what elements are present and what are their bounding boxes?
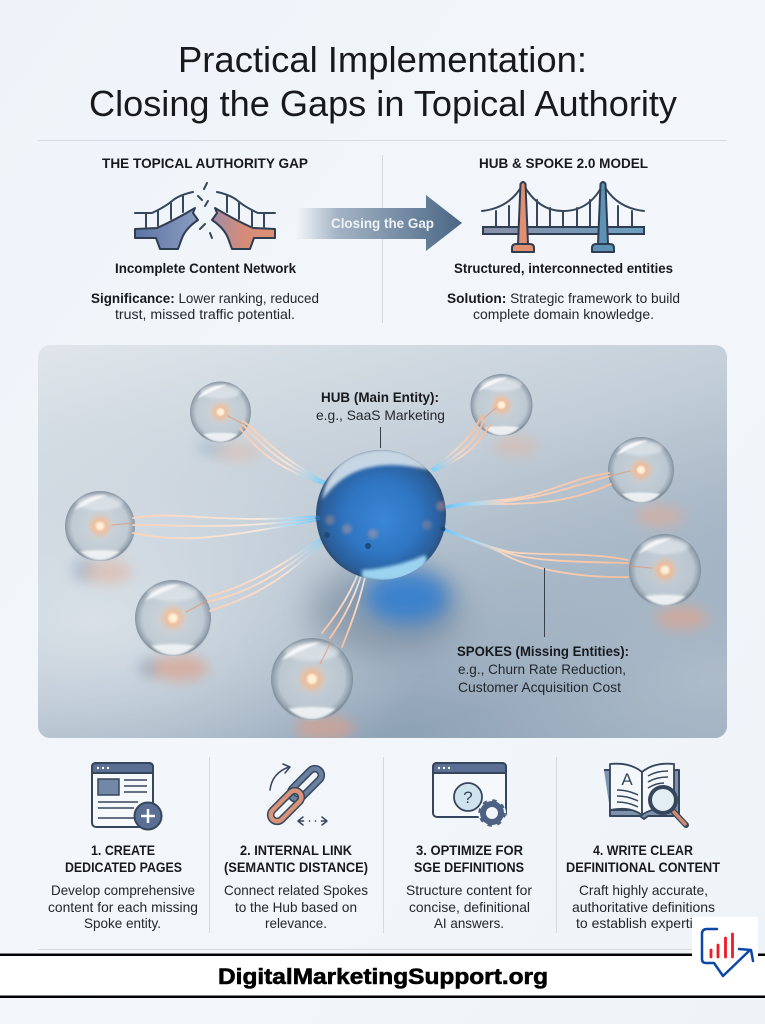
title: Practical Implementation: (178, 39, 587, 80)
text: significance (91, 290, 319, 322)
footer url: DigitalMarketingSupport.org (218, 964, 548, 989)
panel: hub and spoke model (447, 155, 680, 322)
text: solution: complete domain knowledge. (473, 306, 654, 322)
sphere: hub (316, 449, 446, 584)
step 4: write clear definitional content (566, 764, 721, 931)
label: spokes missing entities: SPOKES (Missing Entities): (457, 643, 629, 659)
sphere: spoke left (65, 491, 135, 561)
icon: chain link with arrows (268, 764, 327, 825)
description: content for each missing (48, 899, 198, 915)
description (406, 882, 532, 931)
description (224, 882, 368, 931)
heading: DEDICATED PAGES (65, 860, 182, 875)
description: concise, definitional (409, 899, 530, 915)
heading (65, 843, 182, 875)
icon: window with question mark and gear (433, 763, 506, 827)
description (48, 882, 198, 931)
icon: web page with plus (92, 763, 162, 830)
text: significance: trust, missed traffic potential. (115, 306, 295, 322)
description: Craft highly accurate, (579, 882, 708, 898)
heading (224, 843, 368, 875)
title (89, 39, 677, 124)
label: spokes missing entities: e.g., Churn Rate Reduction, (458, 661, 626, 677)
icon: complete suspension bridge (482, 182, 644, 252)
label: hub main entity: HUB (Main Entity): (321, 389, 439, 405)
spoke connectors (112, 408, 652, 664)
heading (414, 843, 524, 875)
sphere: spoke right (608, 437, 674, 503)
logo: chat bubble with bar chart and arrow (692, 917, 758, 979)
description: AI answers. (434, 915, 504, 931)
text: significance: Significance: Lower ranking, reduced (91, 290, 319, 306)
footer band (0, 954, 765, 998)
description: Develop comprehensive (51, 882, 195, 898)
arrow: closing the gap (296, 195, 462, 251)
heading: hub and spoke 2.0 model: HUB & SPOKE 2.0 MODEL (479, 155, 648, 171)
description: relevance. (265, 915, 327, 931)
caption: structured interconnected entities: Structured, interconnected entities (454, 260, 673, 276)
sphere: spoke lower left (135, 580, 211, 656)
label: hub main entity: e.g., SaaS Marketing (316, 407, 445, 423)
heading: (SEMANTIC DISTANCE) (224, 860, 368, 875)
label: spokes missing entities: Customer Acquisition Cost (458, 679, 621, 695)
heading: DEFINITIONAL CONTENT (566, 860, 721, 875)
description: Spoke entity. (84, 915, 161, 931)
panel: the topical authority gap (91, 155, 319, 322)
sphere: spoke top right (471, 374, 532, 436)
sphere: spoke bottom (271, 638, 353, 720)
title: Closing the Gaps in Topical Authority (89, 83, 677, 124)
heading: 2. INTERNAL LINK (240, 843, 352, 858)
sphere: spoke top left (190, 382, 251, 442)
label: hub main entity (316, 389, 445, 448)
icon: broken bridge (135, 183, 275, 249)
description (572, 882, 715, 931)
heading: SGE DEFINITIONS (414, 860, 524, 875)
step 2: internal link (224, 764, 368, 931)
text: solution: Solution: Strategic framework to build (447, 290, 680, 306)
heading: 4. WRITE CLEAR (593, 843, 693, 858)
description: authoritative definitions (572, 899, 715, 915)
step 1: create dedicated pages (48, 763, 198, 931)
step 3: optimize for sge definitions (406, 763, 532, 931)
heading: 1. CREATE (91, 843, 155, 858)
icon: open book with magnifier: A (621, 770, 633, 789)
description: to establish expertise. (576, 915, 711, 931)
panel: hub and spoke network diagram (38, 345, 727, 740)
description: to the Hub based on (235, 899, 357, 915)
caption: incomplete content network: Incomplete Content Network (115, 260, 296, 276)
arrow: closing the gap: Closing the Gap (331, 215, 434, 231)
icon: open book with magnifier (604, 764, 686, 825)
heading: the topical authority gap: THE TOPICAL AUTHORITY GAP (102, 155, 308, 171)
sphere: spoke lower right (629, 534, 701, 606)
description: Connect related Spokes (224, 882, 368, 898)
icon: window with question mark and gear: ? (463, 788, 473, 807)
description: Structure content for (406, 882, 532, 898)
text: solution (447, 290, 680, 322)
heading: 3. OPTIMIZE FOR (416, 843, 523, 858)
heading (566, 843, 721, 875)
label: spokes missing entities (457, 568, 629, 695)
